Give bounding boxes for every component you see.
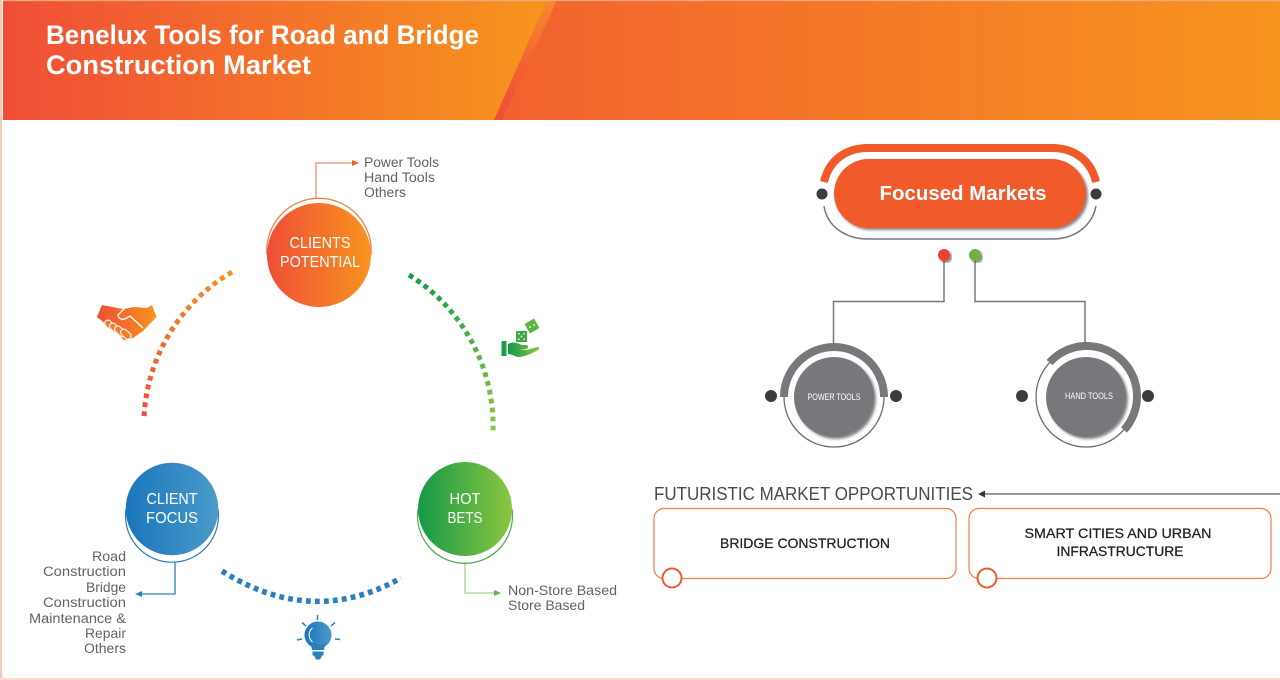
list: client focus: Maintenance &	[29, 611, 126, 626]
node: hand tools	[1016, 346, 1154, 447]
icon: handshake	[97, 305, 156, 341]
node: clients potential: POTENTIAL	[280, 254, 360, 271]
card: bridge construction: BRIDGE CONSTRUCTION	[720, 535, 890, 551]
list: client focus: Construction	[43, 564, 126, 579]
node: clients potential: CLIENTS	[290, 235, 350, 252]
icon: dice in hand	[502, 318, 540, 357]
node: power tools: POWER TOOLS	[808, 392, 860, 402]
header banner	[3, 0, 1280, 120]
card: smart cities and urban infrastructure: INFRASTRUCTURE	[1056, 543, 1184, 559]
list: clients potential: Hand Tools	[364, 170, 435, 185]
arrow: opportunities	[978, 490, 1280, 498]
list: clients potential: Others	[364, 185, 406, 200]
list: clients potential: Power Tools	[364, 155, 439, 170]
node: hot bets	[418, 462, 513, 596]
node: power tools	[765, 347, 902, 447]
list: hot bets: Non-Store Based	[508, 583, 617, 598]
node: hand tools: HAND TOOLS	[1065, 391, 1113, 401]
list: client focus: Construction	[43, 595, 126, 610]
title: Benelux Tools for Road and Bridge	[46, 20, 479, 50]
node: client focus: FOCUS	[146, 510, 198, 527]
card: smart cities and urban infrastructure	[969, 508, 1271, 588]
node: hot bets: BETS	[448, 510, 482, 527]
list: client focus: Others	[84, 641, 126, 656]
heading: futuristic market opportunities: FUTURISTIC MARKET OPPORTUNITIES	[654, 483, 973, 504]
list: client focus: Repair	[85, 626, 127, 641]
list: hot bets: Store Based	[508, 598, 585, 613]
dotted arc: blue	[222, 571, 401, 601]
node: client focus: CLIENT	[146, 491, 198, 508]
focused markets badge	[816, 148, 1102, 239]
card: smart cities and urban infrastructure: SMART CITIES AND URBAN	[1024, 525, 1212, 541]
dotted arc: orange	[144, 272, 232, 418]
card: bridge construction	[654, 508, 956, 588]
dotted arc: green	[409, 275, 493, 432]
node: clients potential	[267, 160, 371, 307]
title: Construction Market	[46, 50, 311, 80]
connector: red dot to power tools	[834, 249, 950, 344]
icon: light bulb	[297, 615, 340, 660]
node: client focus	[125, 463, 218, 597]
connector: green dot to hand tools	[969, 249, 1085, 344]
node: hot bets: HOT	[450, 491, 481, 508]
list: client focus: Bridge	[86, 580, 126, 595]
list: client focus: Road	[92, 549, 126, 564]
focused markets badge: Focused Markets	[880, 182, 1046, 205]
